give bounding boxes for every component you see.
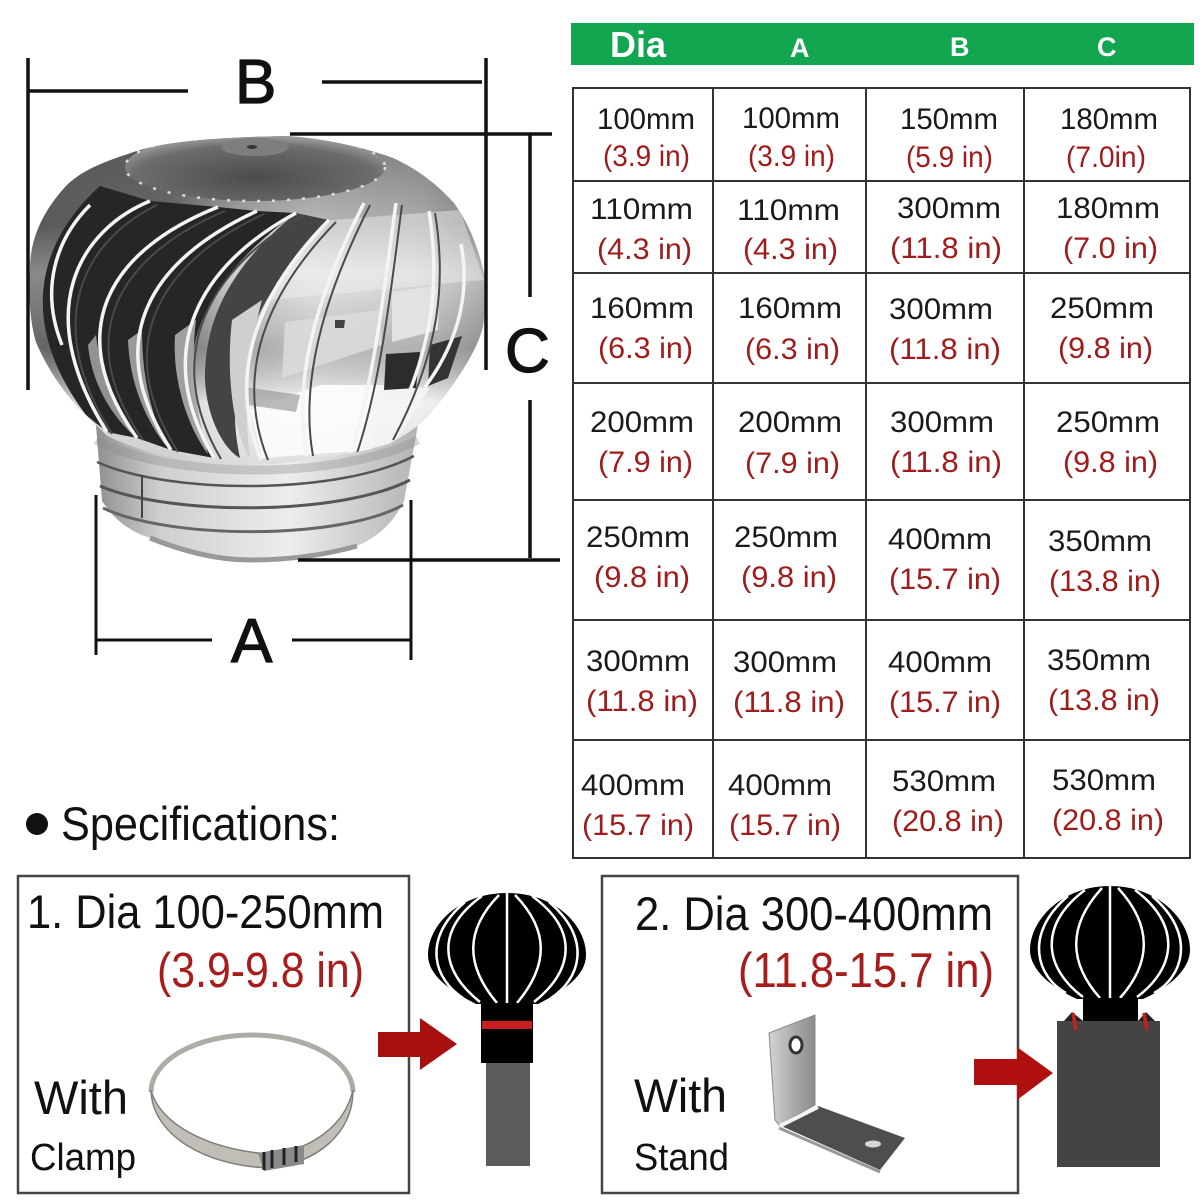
row 200mm: (7.9 in) [598, 446, 693, 479]
row 160mm: (6.3 in) [598, 332, 693, 365]
row 200mm: (7.9 in) [745, 447, 840, 480]
panel: option 1 clamp: Clamp [30, 1137, 136, 1179]
dark gaps between blades [43, 186, 329, 458]
row 250mm: 350mm [1048, 525, 1152, 558]
dimension A: A [231, 607, 273, 676]
row 160mm: 160mm [738, 292, 842, 325]
row 110mm: (11.8 in) [890, 232, 1002, 265]
row 200mm: 300mm [890, 406, 994, 439]
table header bar [571, 23, 1194, 65]
vent dome with curved blades [20, 130, 490, 470]
panel: option 2 stand: 2. Dia 300-400mm [635, 887, 993, 940]
row 400mm: (20.8 in) [892, 805, 1004, 838]
row 200mm [590, 406, 1160, 480]
table header bar: A [790, 33, 810, 63]
row 300mm: 400mm [888, 646, 992, 679]
row 110mm: 300mm [897, 192, 1001, 225]
row 400mm: 530mm [892, 765, 996, 798]
row 300mm: (11.8 in) [733, 686, 845, 719]
table header bar: B [950, 32, 970, 62]
row 200mm: (9.8 in) [1063, 446, 1158, 479]
arrow: to pipe mounting [378, 1018, 457, 1070]
inner silver crescents [88, 300, 262, 458]
row 300mm [586, 644, 1160, 719]
row 160mm: 300mm [889, 293, 993, 326]
icon: vent on wide duct with stand [1030, 886, 1190, 1167]
row 200mm: 250mm [1056, 406, 1160, 439]
panel: option 1 clamp [18, 876, 409, 1193]
table header bar: C [1097, 32, 1116, 62]
row 110mm: (7.0 in) [1063, 232, 1158, 265]
row 300mm: 300mm [733, 646, 837, 679]
specifications heading: Specifications: [61, 797, 340, 850]
table grid [573, 88, 1190, 858]
row 200mm: 200mm [738, 406, 842, 439]
row 110mm: (4.3 in) [597, 233, 692, 266]
row 100mm: (5.9 in) [906, 141, 993, 174]
dimension B [28, 48, 486, 390]
row 250mm: 250mm [734, 521, 838, 554]
row 160mm: 250mm [1050, 292, 1154, 325]
icon: angle bracket [769, 1015, 905, 1172]
row 250mm: 400mm [888, 523, 992, 556]
dimension A [96, 495, 411, 676]
dimension C [290, 134, 560, 560]
row 110mm: 110mm [590, 193, 693, 226]
row 400mm: 400mm [581, 769, 685, 802]
row 100mm: 100mm [742, 102, 840, 135]
row 400mm: (15.7 in) [729, 809, 841, 842]
row 300mm: 350mm [1047, 644, 1151, 677]
dimension C: C [505, 317, 550, 386]
blade ridges [52, 201, 464, 460]
row 400mm: 530mm [1052, 764, 1156, 797]
panel: option 1 clamp: (3.9-9.8 in) [157, 944, 364, 998]
table header bar: Dia [610, 24, 667, 65]
right side reflections [228, 210, 484, 458]
row 100mm [597, 102, 1158, 174]
row 110mm: (4.3 in) [743, 233, 838, 266]
dimension B: B [235, 48, 276, 117]
panel: option 1 clamp: With [34, 1071, 128, 1124]
row 300mm: (13.8 in) [1048, 684, 1160, 717]
row 160mm: (6.3 in) [745, 333, 840, 366]
row 160mm [590, 292, 1154, 366]
panel: option 2 stand: (11.8-15.7 in) [738, 944, 994, 998]
top disc [125, 133, 385, 201]
row 110mm: 110mm [737, 194, 840, 227]
panel: option 2 stand: Stand [634, 1137, 729, 1179]
row 100mm: 150mm [900, 103, 998, 136]
row 250mm: (9.8 in) [741, 561, 837, 594]
arrow: to stand mounting [974, 1047, 1053, 1100]
row 160mm: (11.8 in) [889, 333, 1001, 366]
row 100mm: (7.0in) [1066, 141, 1146, 174]
row 250mm: (13.8 in) [1049, 565, 1161, 598]
size table [573, 88, 1190, 858]
row 250mm: (9.8 in) [594, 561, 690, 594]
icon: hose clamp [151, 1035, 353, 1171]
row 250mm: 250mm [586, 521, 690, 554]
row 300mm: (15.7 in) [889, 686, 1001, 719]
row 200mm: 200mm [590, 406, 694, 439]
row 100mm: (3.9 in) [748, 140, 835, 173]
row 300mm: 300mm [586, 645, 690, 678]
row 100mm: 100mm [597, 103, 695, 136]
product: turbine ventilator with dimensions [20, 48, 560, 676]
icon: vent on narrow pipe with clamp [428, 893, 586, 1166]
vent base collar [96, 425, 418, 560]
row 200mm: (11.8 in) [890, 446, 1002, 479]
row 300mm: (11.8 in) [586, 685, 698, 718]
panel: option 1 clamp: 1. Dia 100-250mm [27, 885, 384, 938]
row 100mm: 180mm [1060, 103, 1158, 136]
row 250mm [586, 521, 1161, 598]
row 400mm: (20.8 in) [1052, 804, 1164, 837]
row 400mm [581, 764, 1164, 842]
row 160mm: 160mm [590, 292, 694, 325]
row 400mm: (15.7 in) [582, 809, 694, 842]
panel: option 2 stand [602, 876, 1018, 1193]
row 100mm: (3.9 in) [603, 140, 690, 173]
row 400mm: 400mm [728, 769, 832, 802]
row 160mm: (9.8 in) [1058, 332, 1153, 365]
panel: option 2 stand: With [634, 1069, 727, 1122]
row 250mm: (15.7 in) [889, 563, 1001, 596]
row 110mm [590, 192, 1160, 266]
row 110mm: 180mm [1056, 192, 1160, 225]
